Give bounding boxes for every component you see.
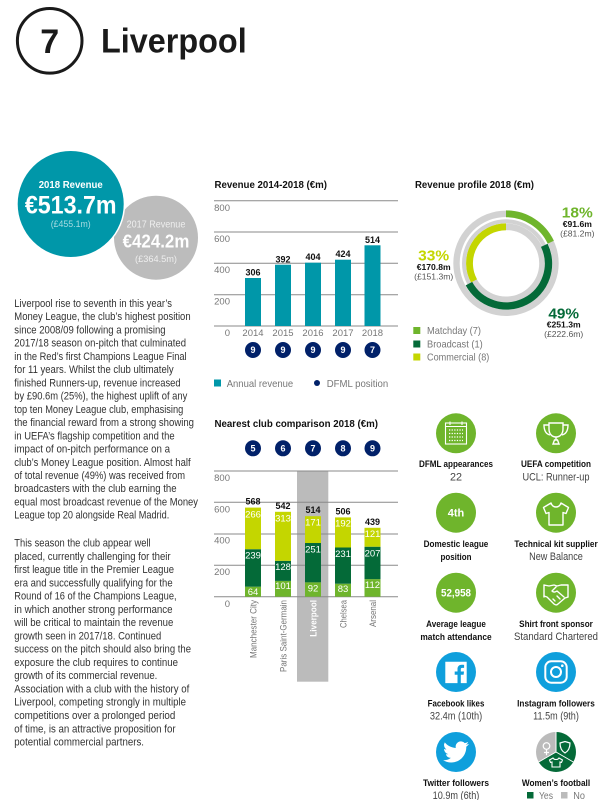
bar chart: revenue 2014-2018: 2014 bbox=[242, 328, 264, 339]
stat: domestic league position: Domestic league bbox=[424, 539, 488, 549]
stat: Instagram followers bbox=[517, 652, 595, 722]
body text paragraph 1: since 2008/09 following a promising bbox=[14, 324, 166, 336]
body text paragraph 1: by £90.6m (25%), the highest uplift of any bbox=[14, 391, 188, 403]
stat: average league attendance: 52,958 bbox=[441, 588, 471, 600]
DFML position markers 2014-2018: 9 bbox=[310, 345, 316, 355]
bar chart: revenue 2014-2018: 400 bbox=[214, 265, 230, 276]
stacked bar chart: nearest clubs: 239 bbox=[245, 550, 261, 562]
donut label: commercial bbox=[414, 248, 453, 282]
stat: DFML appearances: DFML appearances bbox=[419, 459, 493, 469]
stat: technical kit supplier bbox=[514, 493, 598, 563]
stat: DFML appearances: 22 bbox=[450, 472, 462, 484]
stat: technical kit supplier: Technical kit supplier bbox=[514, 539, 598, 549]
body text paragraph 1: impact of on-pitch performance on a bbox=[14, 444, 170, 456]
bar chart: revenue 2014-2018: 200 bbox=[214, 296, 230, 308]
stacked bar chart: nearest clubs: 231 bbox=[335, 549, 351, 560]
2017 revenue circle: €424.2m bbox=[123, 231, 189, 251]
stat: Instagram followers: 11.5m (9th) bbox=[533, 710, 579, 722]
stat: Facebook likes: Facebook likes bbox=[428, 698, 484, 708]
DFML position markers 2014-2018: 9 bbox=[340, 345, 346, 355]
stat: Twitter followers: Twitter followers bbox=[423, 778, 489, 788]
stacked bar chart: nearest clubs: 800 bbox=[214, 473, 230, 484]
legend: revenue chart: Annual revenue bbox=[227, 378, 293, 390]
donut label: broadcast bbox=[544, 305, 583, 339]
bar chart: revenue 2014-2018: 514 bbox=[365, 235, 380, 245]
body text paragraph 1: Liverpool rise to seventh in this year’s bbox=[14, 298, 173, 310]
donut label: broadcast: (£222.6m) bbox=[544, 329, 583, 339]
bar chart: revenue 2014-2018: 424 bbox=[335, 249, 351, 259]
icon: Twitter bird bbox=[443, 741, 469, 762]
DFML position markers 2014-2018 bbox=[245, 342, 380, 358]
body text paragraph 1 bbox=[14, 298, 199, 522]
body text paragraph 1: of total revenue (49%) was received from bbox=[14, 470, 185, 482]
2018 revenue circle: (£455.1m) bbox=[51, 219, 91, 229]
body text paragraph 2: potential commercial partners. bbox=[14, 736, 144, 748]
donut chart: revenue profile bbox=[456, 214, 556, 313]
rank badge bbox=[17, 8, 82, 73]
bar chart: revenue 2014-2018: 2016 bbox=[302, 328, 324, 339]
donut label: broadcast: €251.3m bbox=[547, 320, 581, 330]
stat: DFML appearances bbox=[419, 413, 493, 484]
stacked bar chart: nearest clubs: Manchester City bbox=[248, 600, 260, 658]
icon: Facebook bbox=[445, 662, 467, 683]
icon: calendar bbox=[446, 422, 466, 444]
stacked bar chart: nearest clubs: 400 bbox=[214, 536, 230, 546]
body text paragraph 2: Round of 16 of the Champions League, bbox=[14, 591, 177, 603]
DFML position markers: nearest clubs: 9 bbox=[370, 444, 375, 454]
donut label: matchday bbox=[560, 204, 595, 238]
body text paragraph 1: equal most broadcast revenue of the Money bbox=[14, 496, 199, 508]
title: Liverpool bbox=[101, 23, 247, 61]
body text paragraph 2: in which another strong performance bbox=[14, 604, 173, 616]
stat: Twitter followers bbox=[423, 732, 489, 800]
stacked bar chart: nearest clubs: 112 bbox=[365, 580, 380, 591]
body text paragraph 1: club’s Money League position. Almost half bbox=[14, 457, 191, 469]
bar chart: revenue 2014-2018: 306 bbox=[245, 268, 261, 278]
DFML position markers: nearest clubs: 7 bbox=[310, 444, 316, 454]
stacked bar chart: nearest clubs: 64 bbox=[248, 587, 258, 598]
2017 revenue circle: 2017 Revenue bbox=[127, 220, 186, 230]
stacked bar chart: nearest clubs: 514 bbox=[305, 505, 321, 515]
bar chart: revenue 2014-2018: 600 bbox=[214, 234, 230, 245]
stacked bar chart: nearest clubs: Paris Saint-Germain bbox=[278, 600, 290, 672]
DFML position markers: nearest clubs: 5 bbox=[250, 444, 256, 454]
stacked bar chart: nearest clubs: 121 bbox=[365, 529, 380, 540]
stat: average league attendance bbox=[420, 573, 492, 642]
legend: revenue chart bbox=[214, 378, 388, 390]
body text paragraph 1: League top 20 alongside Real Madrid. bbox=[14, 510, 169, 522]
stat: Facebook likes bbox=[428, 652, 484, 722]
stat: Women's football: Women’s football bbox=[522, 778, 590, 788]
stat: UEFA competition: UCL: Runner-up bbox=[522, 472, 590, 484]
stacked bar chart: nearest clubs: Chelsea bbox=[338, 599, 350, 628]
legend: revenue profile bbox=[413, 325, 489, 364]
icon: women's football pie bbox=[536, 732, 576, 772]
stacked bar chart: nearest clubs: 439 bbox=[365, 517, 380, 527]
stacked bar chart: nearest clubs: 101 bbox=[275, 581, 291, 592]
donut label: matchday: (£81.2m) bbox=[560, 228, 595, 238]
body text paragraph 1: 2017/18 season on-pitch that culminated bbox=[14, 338, 186, 350]
stacked bar chart: nearest clubs: 313 bbox=[275, 514, 291, 524]
bar chart: revenue 2014-2018 bbox=[214, 201, 398, 339]
body text paragraph 1: in the Red’s first Champions League Final bbox=[14, 351, 187, 363]
body text paragraph 2: era and successfully qualifying for the bbox=[14, 577, 173, 589]
body text paragraph 2: competitions over a prolonged period bbox=[14, 710, 175, 722]
2017 revenue circle: (£364.5m) bbox=[135, 254, 177, 264]
icon: handshake bbox=[544, 585, 568, 605]
icon: Instagram bbox=[545, 661, 567, 683]
body text paragraph 2: Liverpool, competing strongly in multiple bbox=[14, 697, 186, 709]
body text paragraph 1: for 11 years. Whilst the club ultimately bbox=[14, 364, 174, 376]
stacked bar chart: nearest clubs: 0 bbox=[225, 599, 230, 610]
stat: Facebook likes: 32.4m (10th) bbox=[430, 710, 482, 722]
legend: revenue profile: Broadcast (1) bbox=[427, 338, 483, 350]
icon: trophy bbox=[544, 423, 568, 444]
stacked bar chart: nearest clubs: 600 bbox=[214, 504, 230, 516]
donut label: commercial: (£151.3m) bbox=[414, 272, 453, 282]
stacked bar chart: nearest clubs: 83 bbox=[338, 584, 348, 595]
bar chart: revenue 2014-2018: 2015 bbox=[272, 328, 294, 339]
body text paragraph 1: in UEFA’s flagship competition and the bbox=[14, 430, 175, 442]
stacked bar chart: nearest clubs: 251 bbox=[305, 544, 321, 556]
bar chart: revenue 2014-2018: 392 bbox=[275, 254, 291, 264]
stat: domestic league position: position bbox=[440, 552, 472, 562]
stat: shirt front sponsor: Shirt front sponsor bbox=[519, 619, 593, 629]
stacked bar chart: nearest clubs: 200 bbox=[214, 567, 230, 578]
stacked bar chart: nearest clubs: 266 bbox=[245, 510, 261, 520]
body text paragraph 1: finished Runners-up, revenue increased bbox=[14, 377, 181, 389]
body text paragraph 2: growth of its commercial revenue. bbox=[14, 670, 157, 682]
body text paragraph 2: This season the club appear well bbox=[14, 538, 151, 550]
legend: revenue profile: Matchday (7) bbox=[427, 325, 481, 337]
bar chart: revenue 2014-2018: 2018 bbox=[362, 328, 383, 339]
DFML position markers: nearest clubs: 8 bbox=[340, 444, 346, 454]
stat: Women's football bbox=[522, 732, 590, 800]
body text paragraph 2: exposure the club requires to continue bbox=[14, 657, 178, 669]
donut label: matchday: €91.6m bbox=[563, 219, 592, 229]
donut label: matchday: 18% bbox=[562, 204, 593, 221]
bar chart: revenue 2014-2018: 800 bbox=[214, 203, 230, 214]
stat: average league attendance: Average league bbox=[426, 619, 486, 629]
body text paragraph 1: the financial reward from a strong showing bbox=[14, 417, 194, 429]
stat: domestic league position bbox=[424, 493, 488, 562]
body text paragraph 2: of time, is an attractive proposition for bbox=[14, 723, 176, 735]
legend: revenue chart: DFML position bbox=[327, 378, 388, 390]
donut label: commercial: €170.8m bbox=[417, 262, 451, 272]
DFML position markers 2014-2018: 7 bbox=[370, 345, 375, 355]
DFML position markers 2014-2018: 9 bbox=[250, 345, 256, 355]
stacked bar chart: nearest clubs: 92 bbox=[308, 584, 318, 594]
stat: shirt front sponsor: Standard Chartered bbox=[514, 631, 598, 643]
body text paragraph 2: growth seen in 2017/18. Continued bbox=[14, 630, 161, 642]
body text paragraph 2 bbox=[13, 538, 191, 748]
body text paragraph 2: Association with a club with the history of bbox=[14, 684, 190, 696]
stat: shirt front sponsor bbox=[514, 573, 598, 643]
stacked bar chart: nearest clubs: 192 bbox=[335, 518, 351, 530]
stacked bar chart: nearest clubs: 207 bbox=[365, 548, 380, 560]
heading: revenue chart: Revenue 2014-2018 (€m) bbox=[214, 179, 327, 191]
donut label: commercial: 33% bbox=[418, 248, 449, 265]
stacked bar chart: nearest clubs: 171 bbox=[305, 518, 321, 528]
legend: revenue profile: Commercial (8) bbox=[427, 352, 489, 364]
heading: revenue profile: Revenue profile 2018 (€m) bbox=[415, 179, 534, 191]
donut label: broadcast: 49% bbox=[548, 305, 579, 322]
2018 revenue circle: €513.7m bbox=[25, 191, 117, 219]
body text paragraph 1: Money League, the club’s highest position bbox=[14, 311, 191, 323]
stacked bar chart: nearest clubs: 128 bbox=[275, 562, 291, 573]
body text paragraph 2: will be critical to maintain the revenue bbox=[13, 617, 173, 629]
DFML position markers: nearest clubs: 6 bbox=[280, 444, 286, 454]
stat: UEFA competition: UEFA competition bbox=[521, 459, 591, 469]
stacked bar chart: nearest clubs: 506 bbox=[335, 506, 351, 516]
body text paragraph 2: success on the pitch should also bring the bbox=[14, 644, 191, 656]
2018 revenue circle: 2018 Revenue bbox=[39, 180, 103, 191]
stat: UEFA competition bbox=[521, 413, 591, 484]
stacked bar chart: nearest clubs: 568 bbox=[245, 496, 261, 506]
body text paragraph 1: top ten Money League club, emphasising bbox=[14, 404, 183, 416]
DFML position markers: nearest clubs bbox=[245, 440, 380, 456]
body text paragraph 2: first league title in the Premier League bbox=[14, 564, 174, 576]
stacked bar chart: nearest clubs: 542 bbox=[275, 501, 291, 511]
DFML position markers 2014-2018: 9 bbox=[280, 345, 286, 355]
heading: nearest club comparison: Nearest club comparison 2018 (€m) bbox=[214, 418, 378, 430]
bar chart: revenue 2014-2018: 404 bbox=[305, 252, 321, 262]
stacked bar chart: nearest clubs: Liverpool bbox=[308, 600, 320, 637]
body text paragraph 2: placed, currently challenging for their bbox=[14, 551, 171, 563]
rank badge: 7 bbox=[40, 23, 59, 61]
stat: domestic league position: 4th bbox=[448, 508, 465, 520]
stat: technical kit supplier: New Balance bbox=[529, 551, 583, 563]
stat: Instagram followers: Instagram followers bbox=[517, 698, 595, 708]
bar chart: revenue 2014-2018: 2017 bbox=[332, 328, 354, 339]
stat: average league attendance: match attendance bbox=[420, 632, 492, 642]
body text paragraph 1: broadcasters with the club earning the bbox=[14, 483, 177, 495]
2018 revenue circle bbox=[16, 150, 125, 258]
2017 revenue circle bbox=[112, 194, 200, 281]
stacked bar chart: nearest clubs: Arsenal bbox=[368, 600, 379, 627]
legend: women's football bbox=[527, 790, 585, 800]
bar chart: revenue 2014-2018: 0 bbox=[225, 328, 230, 339]
icon: shirt bbox=[544, 503, 568, 525]
stacked bar chart: nearest clubs bbox=[214, 471, 398, 682]
